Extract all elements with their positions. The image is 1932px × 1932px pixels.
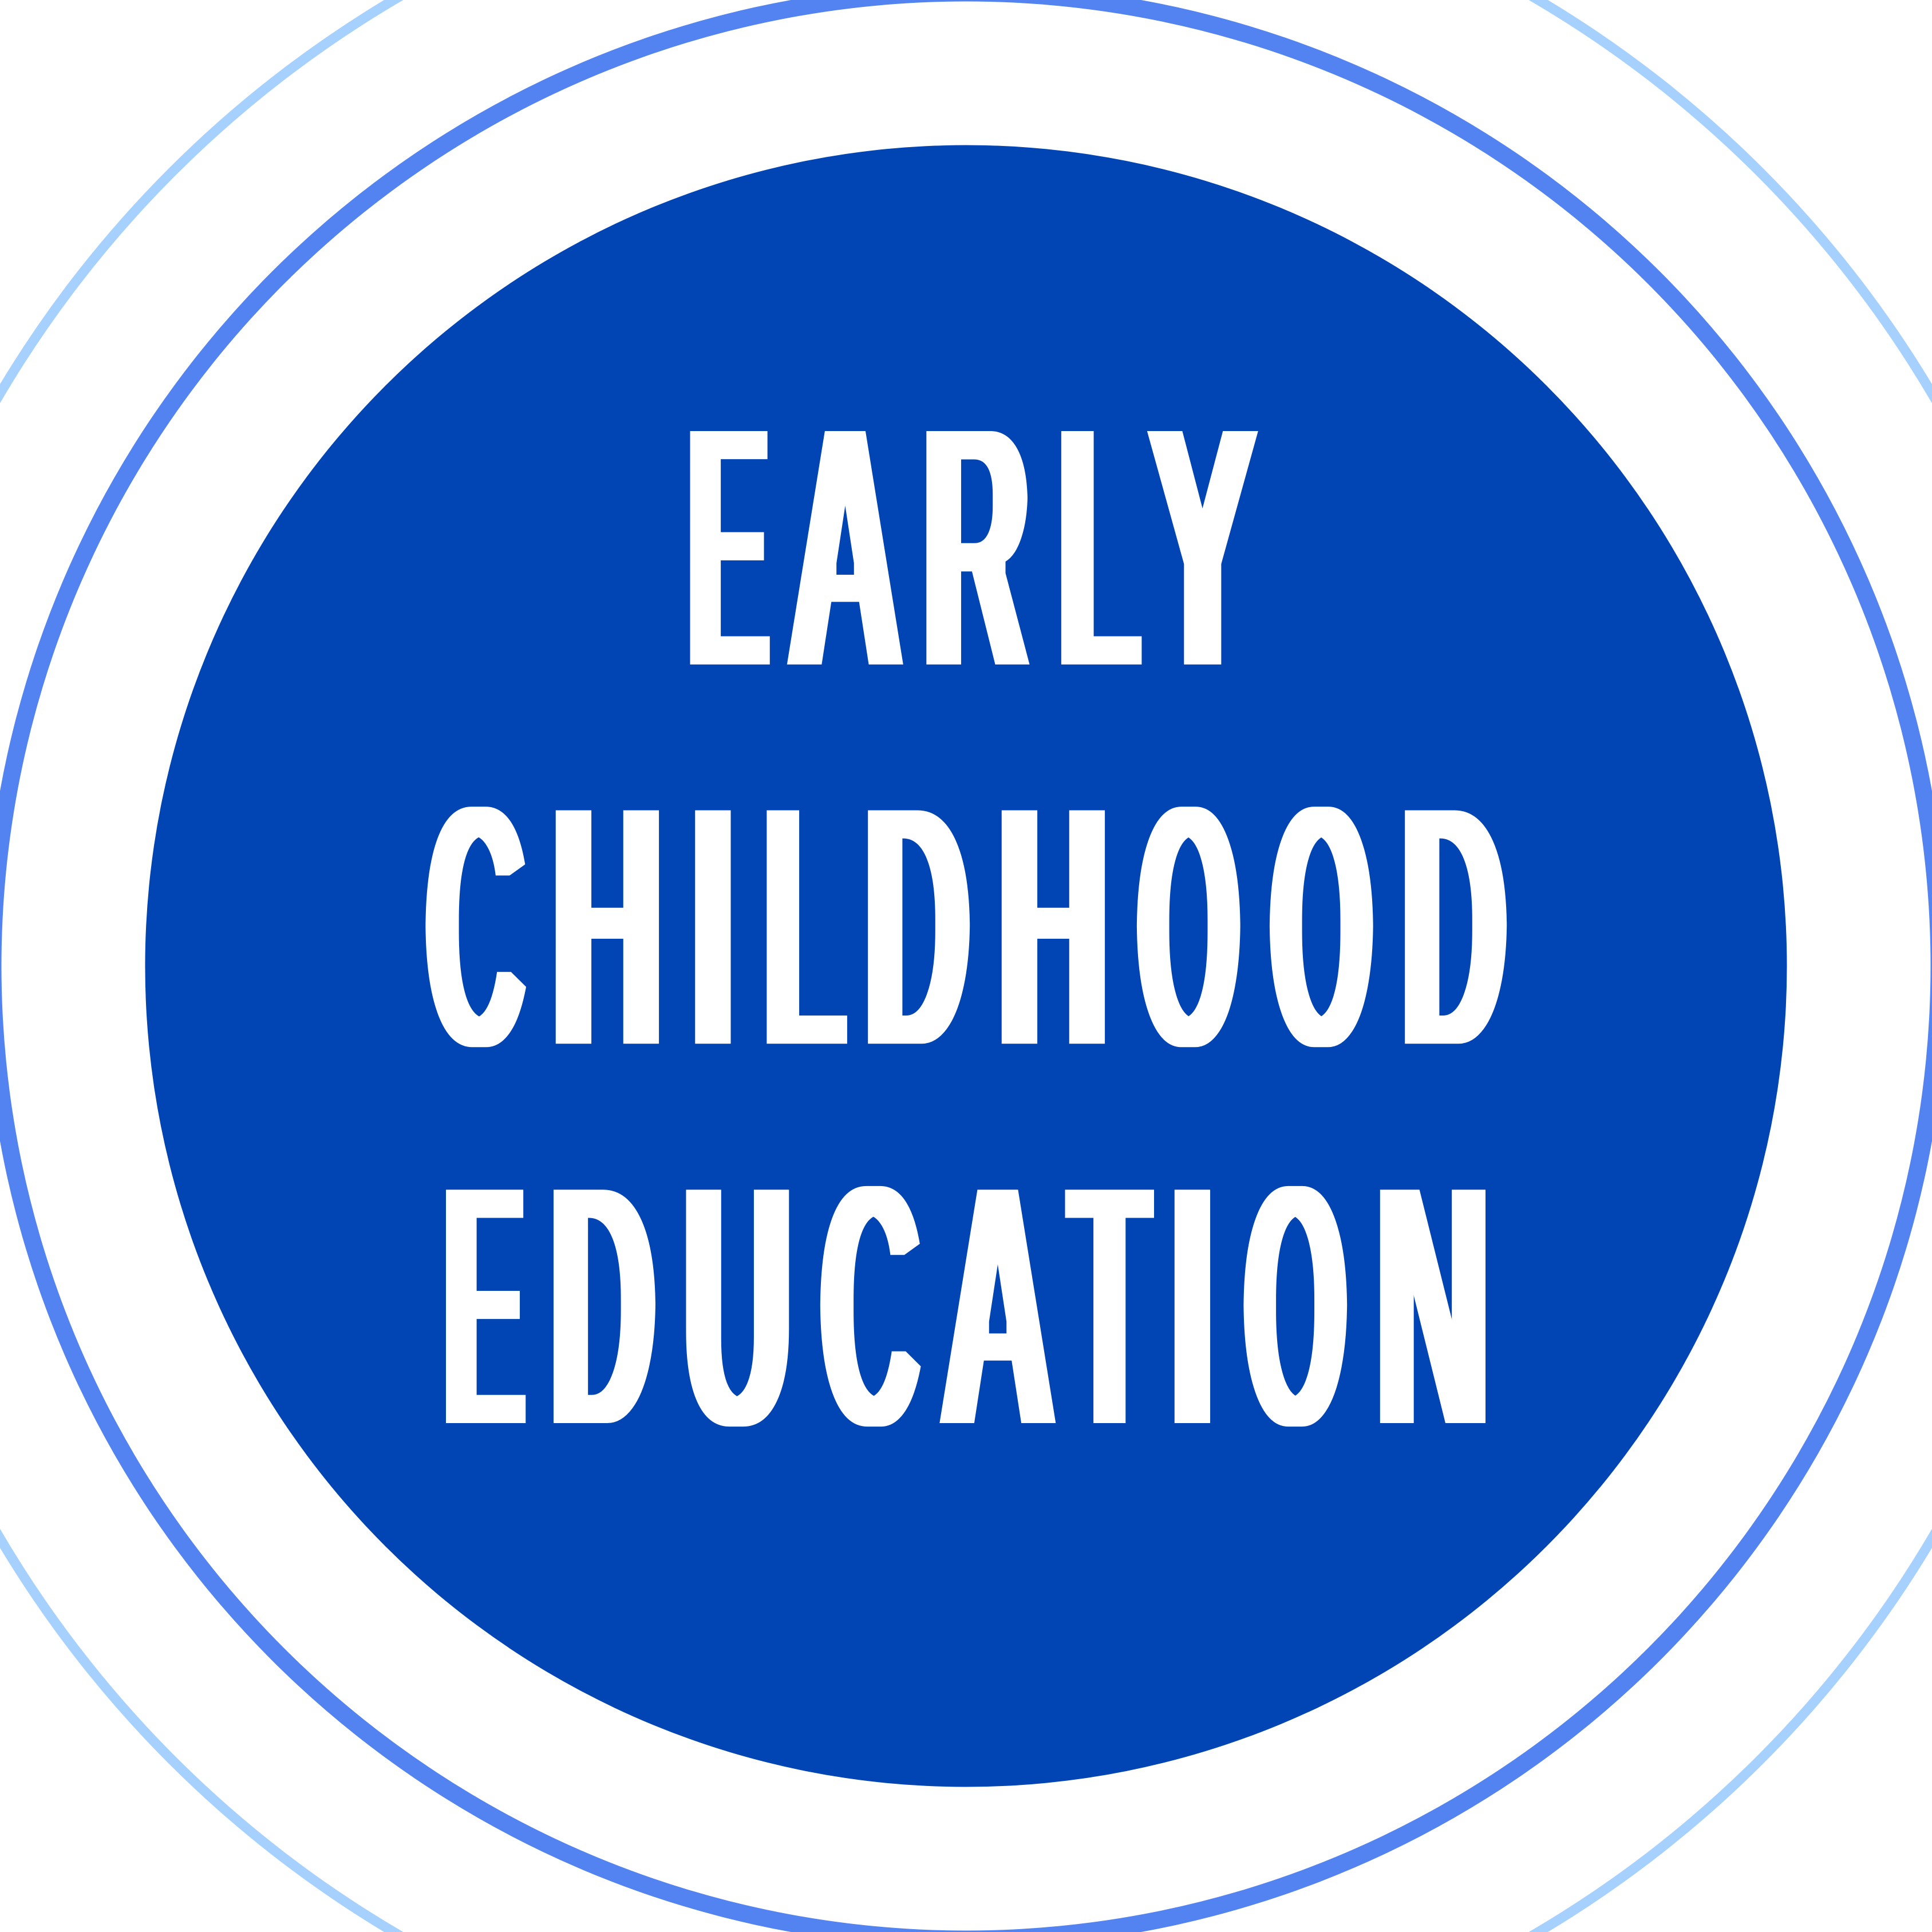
title line: CHILDHOOD: O [1271,727,1372,1125]
title line: CHILDHOOD: I [692,727,734,1125]
title: N [1377,1107,1489,1504]
title line: EDUCATION: U [684,1107,791,1504]
title line: EDUCATION: D [551,1107,655,1504]
title line: CHILDHOOD: C [427,727,524,1125]
title line: EARLY: E [689,348,768,746]
title line: EDUCATION: C [821,1107,919,1504]
title line: CHILDHOOD: D [865,727,969,1125]
title [427,348,1506,1504]
title line: EDUCATION: O [1245,1107,1346,1504]
title line: EDUCATION: T [1070,1107,1148,1504]
title: Y [1148,348,1257,746]
title line: EARLY: R [923,348,1029,746]
title line: EARLY: L [1060,348,1139,746]
central dark blue disc [145,145,1787,1787]
title line: EDUCATION: E [445,1107,523,1504]
title line: CHILDHOOD: H [998,727,1108,1125]
title line: EARLY: A [788,348,902,746]
title line: CHILDHOOD: H [552,727,662,1125]
title line: EDUCATION: A [941,1107,1055,1504]
badge graphic: D [1402,727,1506,1125]
title line: CHILDHOOD: O [1139,727,1239,1125]
title line: CHILDHOOD: L [765,727,844,1125]
title line: EDUCATION: I [1171,1107,1214,1504]
